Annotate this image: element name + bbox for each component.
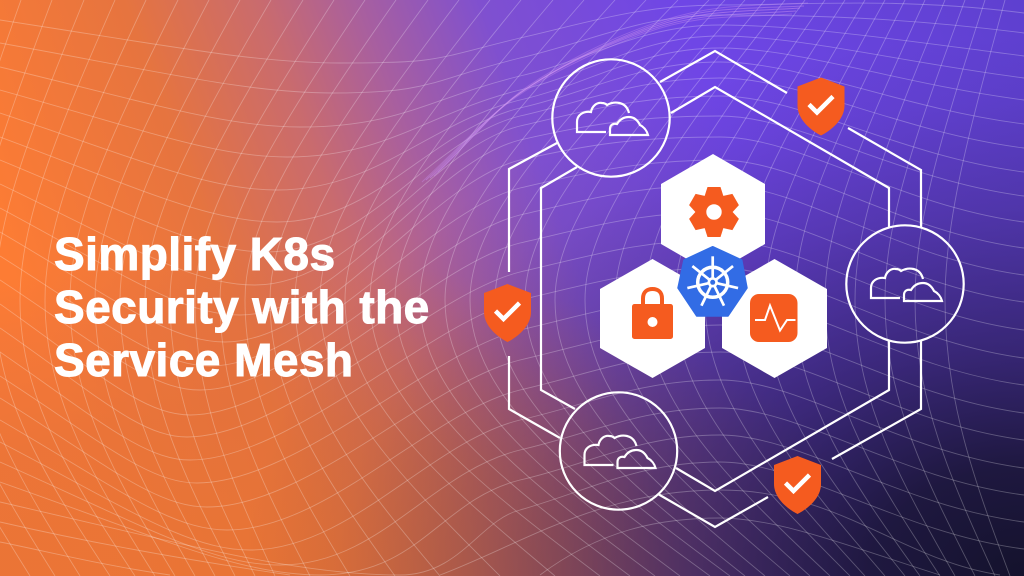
shield: top right	[798, 78, 844, 136]
title: Simplify K8s	[54, 228, 336, 280]
cloud node: top left	[552, 59, 670, 177]
Kubernetes logo	[678, 247, 747, 316]
mesh network hexagon outlines	[509, 51, 921, 527]
cloud node: bottom left	[560, 392, 677, 510]
hexagon: activity monitor	[722, 259, 827, 378]
hexagon: settings gear	[661, 154, 765, 274]
title: Security with the	[54, 281, 430, 333]
hexagon: padlock	[600, 259, 705, 378]
title: Service Mesh	[54, 334, 353, 386]
shield: left	[484, 284, 531, 342]
bright mesh swirl band	[422, 3, 808, 182]
cloud node: right	[846, 225, 964, 343]
shield: bottom	[774, 456, 821, 514]
title	[54, 228, 430, 386]
